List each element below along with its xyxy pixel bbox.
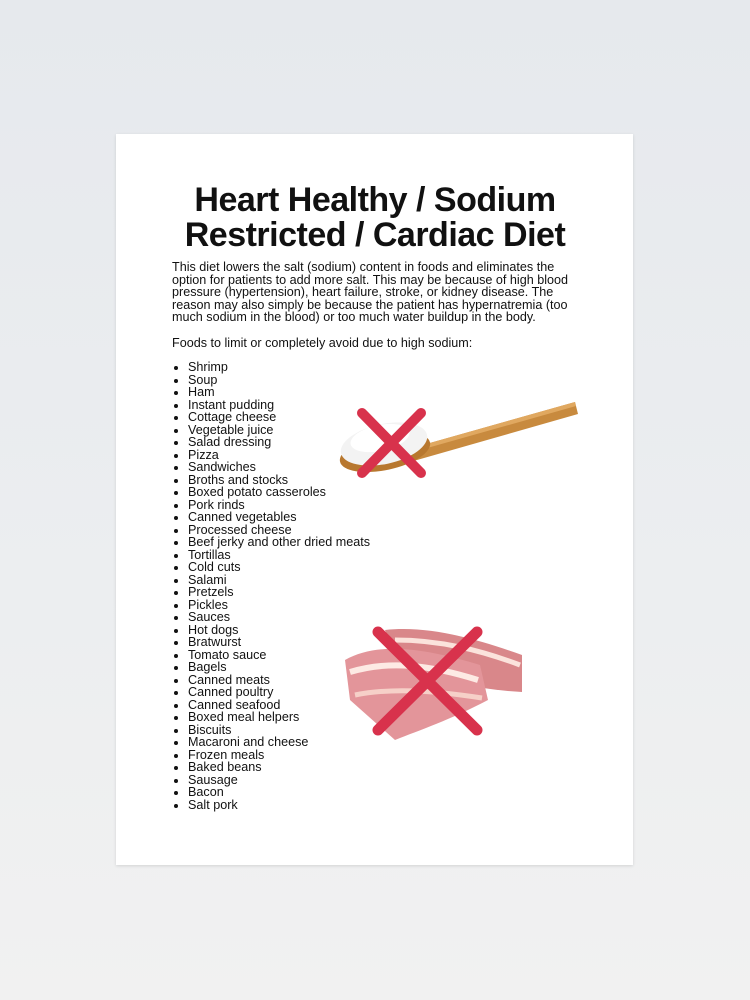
food list: Pickles bbox=[188, 598, 228, 612]
food list: Sandwiches bbox=[188, 460, 256, 474]
food list: Sausage bbox=[188, 772, 238, 786]
intro text: This diet lowers the salt (sodium) content in foods and eliminates the option for patients to add more salt. This may be because of high blood pressure (hypertension), heart failure, stroke, or kidney disease. The reason may also simply be because the patient has hypernatremia (too much sodium in the blood) or too much water buildup in the body. bbox=[172, 260, 568, 324]
food list: Frozen meals bbox=[188, 748, 264, 762]
food list: Beef jerky and other dried meats bbox=[188, 535, 370, 549]
food list: Soup bbox=[188, 372, 217, 386]
food list: Boxed meal helpers bbox=[188, 710, 299, 724]
food list: Ham bbox=[188, 385, 215, 399]
food list: Canned seafood bbox=[188, 698, 280, 712]
food list: Cottage cheese bbox=[188, 410, 276, 424]
food list: Macaroni and cheese bbox=[188, 735, 308, 749]
food list: Pork rinds bbox=[188, 498, 245, 512]
icon: bacon crossed bbox=[345, 626, 522, 740]
food list: Vegetable juice bbox=[188, 422, 273, 436]
food list: Salt pork bbox=[188, 798, 238, 812]
title: Heart Healthy / Sodium bbox=[194, 181, 556, 219]
food list: Pizza bbox=[188, 448, 219, 462]
food list: Bacon bbox=[188, 785, 224, 799]
food list: Hot dogs bbox=[188, 622, 238, 636]
food list: Boxed potato casseroles bbox=[188, 485, 326, 499]
food list: Shrimp bbox=[188, 360, 228, 374]
food list: Instant pudding bbox=[188, 398, 274, 412]
food list: Tomato sauce bbox=[188, 648, 266, 662]
food list: Salami bbox=[188, 572, 226, 586]
food list: Tortillas bbox=[188, 548, 231, 562]
food list: Biscuits bbox=[188, 722, 231, 736]
food list: Canned poultry bbox=[188, 685, 273, 699]
list heading: Foods to limit or completely avoid due to high sodium: bbox=[172, 336, 472, 350]
icon: salt spoon crossed bbox=[340, 402, 578, 478]
food list: Bratwurst bbox=[188, 635, 241, 649]
title: Restricted / Cardiac Diet bbox=[185, 216, 565, 254]
food list: Pretzels bbox=[188, 585, 234, 599]
food list bbox=[174, 360, 370, 812]
food list: Baked beans bbox=[188, 760, 262, 774]
food list: Salad dressing bbox=[188, 435, 271, 449]
food list: Canned meats bbox=[188, 672, 270, 686]
food list: Broths and stocks bbox=[188, 472, 288, 486]
title bbox=[185, 181, 566, 254]
food list: Bagels bbox=[188, 660, 227, 674]
food list: Sauces bbox=[188, 610, 230, 624]
food list: Canned vegetables bbox=[188, 510, 297, 524]
food list: Processed cheese bbox=[188, 522, 292, 536]
poster panel bbox=[116, 134, 633, 865]
food list: Cold cuts bbox=[188, 560, 240, 574]
